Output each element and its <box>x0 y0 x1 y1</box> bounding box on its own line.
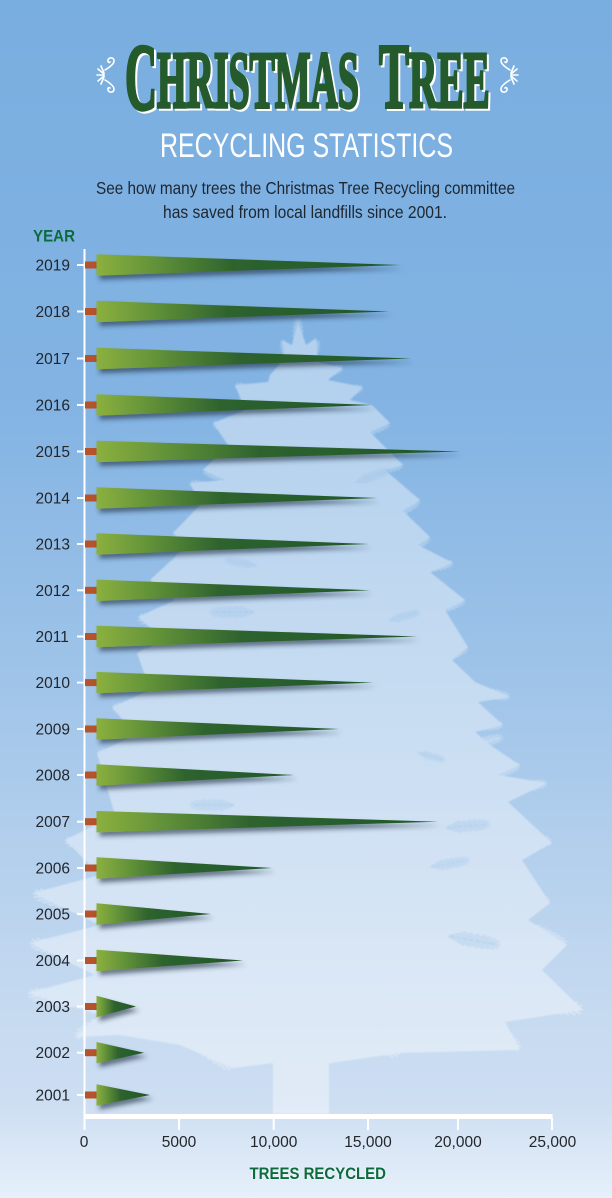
x axis labels <box>80 1134 577 1151</box>
x axis labels: 0 <box>80 1134 89 1151</box>
bar: 2014: 2014 <box>36 490 70 508</box>
y axis title: YEAR <box>33 226 75 246</box>
bar: 2004: 2004 <box>36 953 70 970</box>
tree needle flecks <box>190 466 501 951</box>
bar: 2018 <box>36 301 389 322</box>
bar: 2004 <box>36 950 243 971</box>
title: HRISTMAS <box>157 35 359 125</box>
bar: 2001 <box>36 1084 150 1106</box>
axes <box>84 249 553 1130</box>
bar: 2013 <box>36 533 369 555</box>
bar: 2012: 2012 <box>36 583 70 600</box>
bar: 2011: 2011 <box>36 629 69 646</box>
title: TREE <box>379 24 490 127</box>
title <box>125 24 490 129</box>
bar: 2008: 2008 <box>36 768 70 784</box>
bar: 2006 <box>36 857 272 879</box>
bar: 2012 <box>36 580 370 601</box>
bar: 2010: 2010 <box>36 675 70 692</box>
bar: 2016: 2016 <box>36 398 70 414</box>
x axis labels: 25,000 <box>529 1134 577 1151</box>
x axis title: TREES RECYCLED <box>250 1165 386 1183</box>
x axis labels: 15,000 <box>344 1134 392 1151</box>
bar: 2017: 2017 <box>36 351 70 368</box>
bar: 2003 <box>36 996 136 1017</box>
bar: 2014 <box>36 487 377 509</box>
intro text <box>96 178 515 222</box>
bar: 2002 <box>36 1042 144 1063</box>
bar: 2009: 2009 <box>36 722 70 738</box>
bar: 2018: 2018 <box>36 304 70 321</box>
bar: 2015 <box>36 441 460 462</box>
bar: 2017 <box>36 348 411 369</box>
bar: 2003: 2003 <box>36 999 70 1016</box>
bar: 2009 <box>36 718 339 740</box>
bar: 2005: 2005 <box>36 906 70 924</box>
x axis labels: 10,000 <box>250 1134 298 1151</box>
icon: left ornament <box>97 58 114 92</box>
bar: 2002: 2002 <box>36 1045 70 1062</box>
x axis labels: 5000 <box>162 1134 197 1151</box>
subtitle: RECYCLING STATISTICS <box>160 127 453 165</box>
icon: right ornament <box>501 58 518 92</box>
bar: 2005 <box>36 903 211 925</box>
bar: 2016 <box>36 394 372 416</box>
bar: 2011 <box>36 626 417 647</box>
bar: 2015: 2015 <box>36 444 70 461</box>
bar: 2013: 2013 <box>36 536 70 554</box>
bar: 2007: 2007 <box>36 814 70 831</box>
intro text: See how many trees the Christmas Tree Recycling committee <box>96 178 515 198</box>
bar: 2019 <box>36 254 400 276</box>
tree silhouette <box>27 318 584 1114</box>
intro text: has saved from local landfills since 2001. <box>163 202 447 222</box>
bar: 2001: 2001 <box>36 1088 70 1104</box>
bar: 2006: 2006 <box>36 860 70 878</box>
bar: 2010 <box>36 672 373 693</box>
bar: 2008 <box>36 764 294 786</box>
bar: 2019: 2019 <box>36 258 70 274</box>
x axis labels: 20,000 <box>434 1134 482 1151</box>
title: C <box>125 25 157 129</box>
bar: 2007 <box>36 811 438 832</box>
